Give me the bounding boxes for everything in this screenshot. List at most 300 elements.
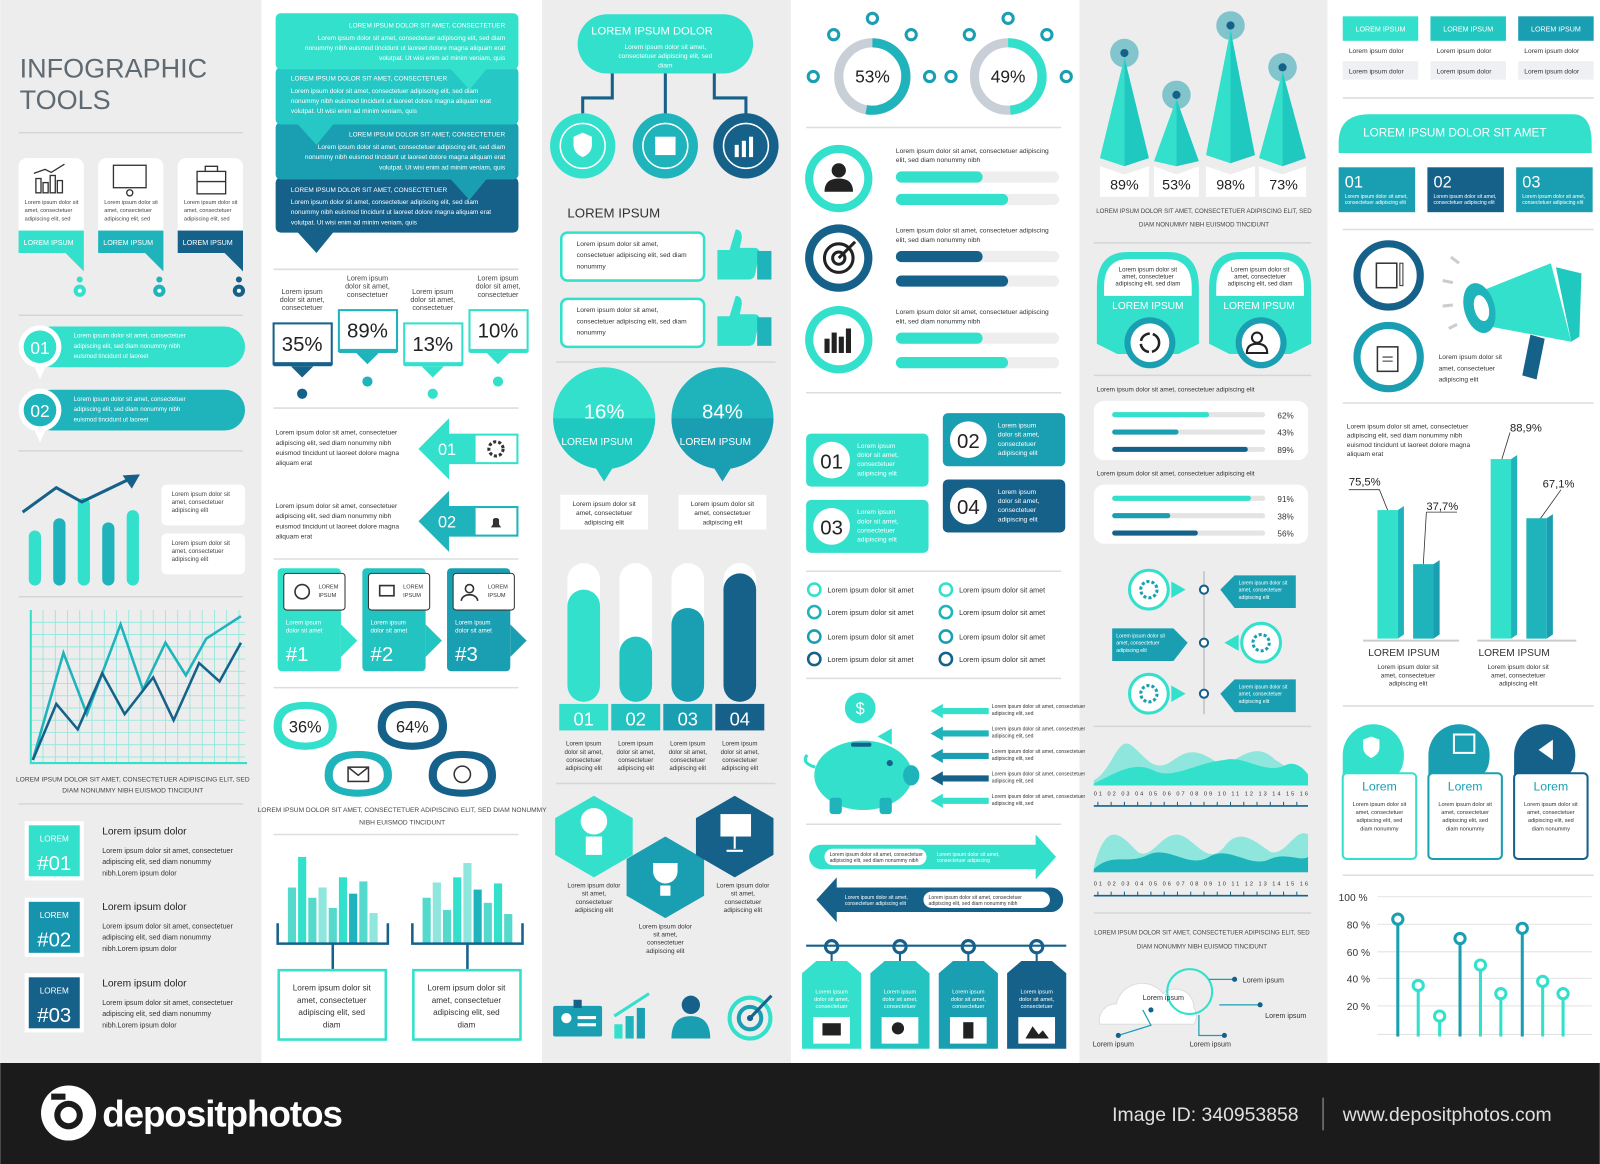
3D bar chart: 75,5% [1349, 477, 1381, 489]
capsule bar chart: adipiscing elit [669, 765, 706, 772]
mini bar chart left: adipiscing elit, sed [298, 1008, 366, 1017]
capsule bar chart: consectetuer [618, 757, 653, 764]
capsule bar chart: consectetuer [670, 757, 705, 764]
numbered boxes 01-04: dolor sit amet, [857, 518, 899, 525]
3D bar chart: 88,9% [1510, 423, 1542, 435]
caption [1094, 929, 1310, 951]
banner: Lorem ipsum dolor sit amet, [1434, 194, 1496, 200]
three icon cards: LOREM IPSUM [24, 239, 74, 247]
area chart 1: 01 02 03 04 05 06 07 08 09 10 11 12 13 14 15 16 [1094, 792, 1308, 798]
mini bar chart left: Lorem ipsum dolor sit [293, 984, 371, 993]
stacked speech boxes: LOREM IPSUM DOLOR SIT AMET, CONSECTETUER [349, 23, 506, 30]
capsule bar chart: Lorem ipsum [618, 741, 653, 748]
capsule bar chart: 03 [678, 708, 698, 729]
capsule bar chart [559, 563, 764, 772]
caption: NIBH EUISMOD TINCIDUNT [359, 819, 445, 826]
column 4 [802, 13, 1086, 1049]
hexagons: sit amet, [731, 891, 755, 898]
grid line chart [31, 610, 247, 763]
numbered boxes 01-04: Lorem ipsum [857, 509, 896, 516]
3D bar chart: euismod tincidunt ut laoreet dolore magna [1347, 442, 1470, 449]
icon: camera logo [41, 1085, 96, 1141]
circle 16%: 16% [584, 401, 625, 423]
two shield cards: Lorem ipsum dolor sit [1119, 266, 1177, 273]
capsule bar chart: dolor sit amet, [669, 749, 707, 756]
checklist: Lorem ipsum dolor sit amet [959, 609, 1045, 617]
checklist: Lorem ipsum dolor sit amet [828, 609, 913, 617]
cards #1 #2 #3 [278, 568, 527, 671]
stacked speech boxes: nonummy nibh euismod tincidunt ut laoreet dolore magna aliquam erat [291, 209, 491, 216]
numbered boxes 01-04: 04 [957, 497, 980, 519]
gear timeline: amet, consectetuer [1116, 641, 1160, 647]
banner 01: euismod tincidunt ut laoreet [74, 353, 149, 360]
cards #1 #2 #3: dolor sit amet [371, 627, 407, 634]
icon row: person [805, 145, 1059, 212]
area chart 2: 01 02 03 04 05 06 07 08 09 10 11 12 13 14 15 16 [1094, 881, 1308, 887]
list #02: adipiscing elit, sed diam nonummy [102, 934, 212, 942]
arrow 01: aliquam erat [276, 460, 312, 467]
bar chart with arrow: Lorem ipsum dolor sit [172, 540, 230, 547]
top tabs: Lorem ipsum dolor [1437, 68, 1492, 75]
list #01: Lorem ipsum dolor [102, 826, 187, 837]
3D bar chart: aliquam erat [1347, 451, 1383, 458]
title: INFOGRAPHIC [20, 54, 207, 84]
bubbles [274, 701, 496, 797]
three icon cards: adipiscing elit, sed [184, 216, 230, 222]
top tabs: LOREM IPSUM [1531, 26, 1581, 34]
list #02 [25, 898, 234, 957]
list #03: Lorem ipsum dolor [102, 978, 187, 989]
arrow list: adipiscing elit, sed [992, 711, 1034, 717]
three icon cards: adipiscing elit, sed [104, 216, 150, 222]
numbered boxes 01-04: dolor sit amet, [857, 452, 899, 459]
percentage tags: dolor sit amet, [476, 283, 520, 291]
two shield cards: LOREM IPSUM [1112, 301, 1183, 312]
stacked speech boxes: volutpat. Ut wisi enim ad minim veniam, quis [291, 219, 417, 226]
capsule bar chart: dolor sit amet, [617, 749, 655, 756]
gear timeline: amet, consectetuer [1239, 692, 1282, 698]
gear timeline: adipiscing elit [1239, 699, 1270, 705]
numbered boxes 01-04: consectetuer [857, 461, 896, 468]
icon row: person: elit, sed diam nonummy nibh [896, 157, 981, 164]
top pill with connectors [550, 14, 779, 179]
circle 84%: adipiscing elit [703, 519, 743, 526]
donut 53%: 53% [855, 67, 890, 87]
list #01: adipiscing elit, sed diam nonummy [102, 858, 212, 866]
cone chart: 73% [1269, 178, 1298, 194]
list #03 [25, 973, 234, 1032]
lollipop chart: 60 % [1347, 948, 1370, 959]
top pill with connectors: Lorem ipsum dolor sit amet, [624, 44, 706, 51]
double arrows: adipiscing elit, sed diam nonummy nibh [929, 901, 1018, 907]
cards #1 #2 #3: IPSUM [403, 593, 421, 599]
progress panel 2: 38% [1277, 512, 1294, 521]
speech cards [1343, 724, 1588, 859]
capsule bar chart: dolor sit amet, [565, 749, 603, 756]
list #03: LOREM [40, 987, 69, 996]
arrow list: adipiscing elit, sed [992, 801, 1034, 807]
percentage tags [274, 275, 528, 399]
caption: LOREM IPSUM DOLOR SIT AMET, CONSECTETUER ADIPISCING ELIT, SED [16, 776, 250, 783]
mini bar chart left: amet, consectetuer [297, 996, 367, 1005]
stacked speech boxes: nonummy nibh euismod tincidunt ut laoreet dolore magna aliquam erat [305, 154, 505, 161]
cards #1 #2 #3: LOREM [318, 585, 339, 591]
arrow 02: euismod tincidunt ut laoreet dolore magna [276, 523, 399, 530]
percentage tags: Lorem ipsum [282, 288, 323, 296]
double arrows: Lorem ipsum dolor sit amet, [937, 852, 1000, 858]
hexagons: Lorem ipsum dolor [716, 883, 770, 890]
progress panel 2 [1094, 470, 1308, 544]
footer bar: depositphotos [102, 1093, 342, 1134]
column 3 [550, 14, 779, 1039]
percentage tags: 10% [478, 321, 518, 343]
donut 49%: 49% [991, 67, 1025, 87]
stacked speech boxes: Lorem ipsum dolor sit amet, consectetuer adipiscing elit, sed diam [291, 88, 478, 95]
box with thumb 1 [561, 230, 771, 281]
three icon cards: Lorem ipsum dolor sit [184, 200, 238, 206]
speech cards: Lorem [1533, 780, 1568, 794]
double arrows: Lorem ipsum dolor sit amet, consectetuer [830, 852, 923, 858]
icon row: target: elit, sed diam nonummy nibh [896, 237, 981, 244]
caption: DIAM NONUMMY NIBH EUISMOD TINCIDUNT [1137, 944, 1267, 951]
capsule bar chart: Lorem ipsum [670, 741, 705, 748]
stacked speech boxes: Lorem ipsum dolor sit amet, consectetuer adipiscing elit, sed diam [318, 144, 505, 151]
circle 84% [671, 367, 773, 529]
bar chart with arrow: amet, consectetuer [172, 548, 224, 555]
area chart 1 [1094, 743, 1308, 806]
stacked speech boxes [276, 13, 518, 253]
speech cards: Lorem [1448, 780, 1482, 794]
lollipop chart: 100 % [1339, 893, 1368, 904]
list #03: Lorem ipsum dolor sit amet, consectetuer [102, 999, 234, 1007]
circle 16%: Lorem ipsum dolor sit [572, 501, 636, 508]
capsule bar chart: consectetuer [722, 757, 757, 764]
caption [16, 776, 250, 795]
bar chart with arrow [23, 474, 245, 586]
list #02: LOREM [40, 911, 69, 920]
hexagons: adipiscing elit [724, 907, 762, 914]
banner: LOREM IPSUM DOLOR SIT AMET [1363, 127, 1547, 140]
cloud network: Lorem ipsum [1093, 1041, 1134, 1049]
progress panel 1 [1094, 387, 1308, 460]
3D bar chart: 67,1% [1543, 479, 1575, 491]
capsule bar chart: consectetuer [566, 757, 601, 764]
checklist [808, 584, 1045, 665]
arrow 01 [276, 418, 518, 479]
hexagons: adipiscing elit [646, 948, 685, 955]
three icon cards: amet, consectetuer [104, 208, 152, 214]
progress panel 2: 91% [1277, 495, 1294, 504]
list #03: adipiscing elit, sed diam nonummy [102, 1010, 212, 1018]
cards #1 #2 #3: #3 [455, 644, 478, 666]
two shield cards: adipiscing elit, sed diam [1115, 281, 1180, 288]
hexagons: consectetuer [576, 899, 613, 906]
gear timeline: adipiscing elit [1239, 595, 1270, 601]
speech cards: Lorem ipsum dolor sit [1524, 802, 1578, 808]
stacked speech boxes: LOREM IPSUM DOLOR SIT AMET, CONSECTETUER [291, 187, 447, 194]
banner: 03 [1522, 174, 1540, 192]
arrow 01: adipiscing elit, sed diam nonummy nibh [276, 440, 392, 447]
bar chart with arrow: Lorem ipsum dolor sit [172, 491, 230, 498]
stacked speech boxes: LOREM IPSUM DOLOR SIT AMET, CONSECTETUER [349, 132, 506, 139]
list #01: LOREM [40, 835, 69, 844]
arrow 02 [276, 491, 518, 552]
3D bar chart: LOREM IPSUM [1478, 648, 1550, 659]
list #02: Lorem ipsum dolor sit amet, consectetuer [102, 922, 234, 930]
top tabs: Lorem ipsum dolor [1349, 68, 1405, 75]
percentage tags: consectetuer [478, 291, 519, 299]
hanging tags: Lorem ipsum [815, 990, 848, 996]
arrow list: Lorem ipsum dolor sit amet, consectetuer [992, 771, 1086, 777]
area chart 2 [1094, 833, 1308, 896]
mini bar chart right: diam [458, 1020, 475, 1029]
bar chart with arrow: adipiscing elit [172, 556, 209, 563]
capsule bar chart: Lorem ipsum [566, 741, 601, 748]
gear timeline: amet, consectetuer [1239, 588, 1282, 594]
stacked speech boxes: Lorem ipsum dolor sit amet, consectetuer adipiscing elit, sed diam [291, 199, 478, 206]
list #02: Lorem ipsum dolor [102, 902, 187, 913]
hanging tags [802, 941, 1066, 1049]
numbered boxes 01-04 [806, 413, 1065, 553]
banner 02: adipiscing elit, sed diam nonummy nibh [74, 406, 180, 413]
banner: consectetuer adipiscing elit [1522, 200, 1584, 206]
list #01 [25, 821, 234, 880]
numbered boxes 01-04: 03 [820, 518, 843, 540]
progress panel 1: 89% [1277, 446, 1294, 455]
hexagons: Lorem ipsum dolor [567, 883, 621, 890]
arrow list: adipiscing elit, sed [992, 778, 1034, 784]
donut 49% [946, 13, 1071, 110]
icon row: chart [805, 306, 1059, 373]
cards #1 #2 #3: IPSUM [318, 593, 337, 599]
banner 02: 02 [30, 401, 50, 421]
speech cards: adipiscing elit, sed [1528, 818, 1574, 824]
box with thumb 1: Lorem ipsum dolor sit amet, [577, 241, 658, 248]
stacked speech boxes: nonummy nibh euismod tincidunt ut laoreet dolore magna aliquam erat [305, 45, 505, 52]
percentage tags: Lorem ipsum [477, 275, 519, 283]
speech cards: Lorem ipsum dolor sit [1438, 802, 1492, 808]
3D bar chart: Lorem ipsum dolor sit amet, consectetuer [1347, 423, 1469, 430]
hexagons [555, 796, 773, 955]
stacked speech boxes: volutpat. Ut wisi enim ad minim veniam, quis [291, 108, 417, 115]
checklist: Lorem ipsum dolor sit amet [828, 656, 913, 664]
capsule bar chart: Lorem ipsum [722, 741, 757, 748]
progress panel 1: Lorem ipsum dolor sit amet, consectetuer adipiscing elit [1097, 387, 1255, 394]
icon circles and megaphone: amet, consectetuer [1439, 365, 1496, 372]
donut 53% [808, 13, 935, 110]
cloud network: Lorem ipsum [1190, 1041, 1231, 1049]
arrow 01: Lorem ipsum dolor sit amet, consectetuer [276, 430, 398, 437]
lollipop chart: 40 % [1347, 974, 1370, 985]
3D bar chart: Lorem ipsum dolor sit [1377, 664, 1439, 671]
double arrows: consectetuer adipiscing elit [845, 901, 907, 907]
capsule bar chart: 02 [626, 708, 646, 729]
arrow 02: aliquam erat [276, 534, 312, 541]
hanging tags: Lorem ipsum [952, 990, 985, 996]
stacked speech boxes: volutpat. Ut wisi enim ad minim veniam, quis [379, 55, 505, 62]
hanging tags: consectetuer [1021, 1004, 1053, 1010]
cards #1 #2 #3: Lorem ipsum [286, 619, 321, 626]
top pill with connectors: consectetuer adipiscing elit, sed [618, 53, 713, 60]
capsule bar chart: 01 [574, 708, 594, 729]
hanging tags: consectetuer [816, 1004, 848, 1010]
arrow 01: 01 [438, 441, 456, 459]
progress panel 2: 56% [1277, 530, 1294, 539]
checklist: Lorem ipsum dolor sit amet [828, 587, 913, 595]
footer bar: Image ID: 340953858 [1112, 1104, 1299, 1126]
three icon cards: amet, consectetuer [25, 208, 73, 214]
capsule bar chart: adipiscing elit [721, 765, 758, 772]
numbered boxes 01-04: adipiscing elit [998, 516, 1038, 523]
top tabs: Lorem ipsum dolor [1524, 68, 1580, 75]
piggy bank: $ [856, 700, 865, 718]
arrow 02: 02 [438, 513, 456, 531]
hexagons: sit amet, [653, 932, 678, 939]
speech cards: amet, consectetuer [1527, 810, 1575, 816]
banner 02: euismod tincidunt ut laoreet [74, 416, 149, 423]
numbered boxes 01-04: adipiscing elit [998, 450, 1038, 457]
percentage tags: Lorem ipsum [347, 275, 388, 283]
banner: Lorem ipsum dolor sit amet, [1345, 194, 1408, 200]
mini bar chart right: Lorem ipsum dolor sit [427, 984, 506, 993]
circle 16% [553, 367, 655, 529]
banner 01: 01 [30, 338, 50, 358]
arrow 02: adipiscing elit, sed diam nonummy nibh [276, 513, 392, 520]
list #01: Lorem ipsum dolor sit amet, consectetuer [102, 847, 234, 855]
two shield cards: amet, consectetuer [1234, 274, 1286, 281]
arrow list: Lorem ipsum dolor sit amet, consectetuer [992, 794, 1086, 800]
list #02: #02 [37, 930, 71, 952]
hexagons: consectetuer [725, 899, 762, 906]
hexagons: consectetuer [647, 940, 685, 947]
heading lorem ipsum: LOREM IPSUM [567, 205, 660, 220]
mini bar chart right [412, 863, 523, 1040]
cloud network: Lorem ipsum [1143, 994, 1184, 1002]
capsule bar chart: 04 [730, 708, 750, 729]
hanging tags: Lorem ipsum [884, 990, 917, 996]
circle 84%: amet, consectetuer [694, 510, 751, 517]
banner: Lorem ipsum dolor sit amet, [1522, 194, 1585, 200]
3D bar chart: adipiscing elit [1389, 681, 1427, 688]
list #03: #03 [37, 1005, 71, 1027]
three icon cards: amet, consectetuer [184, 208, 232, 214]
hanging tags: dolor sit amet, [882, 997, 918, 1003]
3D bar chart: adipiscing elit, sed diam nonummy nibh [1347, 433, 1463, 440]
speech cards: amet, consectetuer [1356, 810, 1403, 816]
numbered boxes 01-04: 02 [957, 431, 980, 453]
speech cards: adipiscing elit, sed [1357, 818, 1402, 824]
icon circles and megaphone: adipiscing elit [1439, 377, 1479, 384]
bar chart with arrow: adipiscing elit [172, 507, 209, 514]
caption: LOREM IPSUM DOLOR SIT AMET, CONSECTETUER ADIPISCING ELIT, SED [1094, 929, 1310, 936]
circle 16%: LOREM IPSUM [561, 437, 633, 448]
numbered boxes 01-04: consectetuer [998, 507, 1037, 514]
list #03: nibh.Lorem ipsum dolor [102, 1021, 177, 1029]
speech cards: Lorem [1362, 780, 1397, 794]
mini bar chart right: adipiscing elit, sed [433, 1008, 500, 1017]
numbered boxes 01-04: Lorem ipsum [857, 443, 896, 450]
banner: consectetuer adipiscing elit [1345, 200, 1407, 206]
two shield cards [1097, 252, 1311, 368]
banner 02: Lorem ipsum dolor sit amet, consectetuer [74, 396, 186, 403]
top tabs: Lorem ipsum dolor [1437, 48, 1492, 55]
cards #1 #2 #3: IPSUM [488, 593, 506, 599]
cards #1 #2 #3: #1 [286, 644, 309, 666]
numbered boxes 01-04: consectetuer [857, 528, 896, 535]
percentage tags: 13% [412, 334, 453, 356]
three icon cards: LOREM IPSUM [103, 239, 153, 247]
top tabs: Lorem ipsum dolor [1349, 48, 1405, 55]
three icon cards: adipiscing elit, sed [25, 216, 71, 222]
arrow 01: euismod tincidunt ut laoreet dolore magna [276, 450, 399, 457]
box with thumb 2: Lorem ipsum dolor sit amet, [577, 307, 658, 314]
mini bar chart left: diam [323, 1020, 341, 1029]
stacked speech boxes: nonummy nibh euismod tincidunt ut laoreet dolore magna aliquam erat [291, 98, 491, 105]
list #01: nibh.Lorem ipsum dolor [102, 869, 177, 877]
column 2 [258, 13, 547, 1040]
icon row: chart: Lorem ipsum dolor sit amet, consectetuer adipiscing [896, 309, 1049, 316]
double arrows: consectetuer adipiscing [937, 858, 990, 864]
banner: 02 [1434, 174, 1452, 192]
caption: LOREM IPSUM DOLOR SIT AMET, CONSECTETUER ADIPISCING ELIT, SED DIAM NONUMMY [258, 807, 547, 814]
cards #1 #2 #3: dolor sit amet [286, 627, 323, 634]
hanging tags: dolor sit amet, [814, 997, 850, 1003]
column 1 [16, 54, 250, 1032]
cards #1 #2 #3: #2 [371, 644, 393, 666]
3D bar chart: adipiscing elit [1499, 681, 1538, 688]
icon row: target [805, 224, 1059, 292]
banner: 01 [1345, 174, 1363, 192]
mini bar chart right: amet, consectetuer [432, 996, 501, 1005]
list #02: nibh.Lorem ipsum dolor [102, 945, 177, 953]
hanging tags: consectetuer [884, 1004, 916, 1010]
stacked speech boxes: volutpat. Ut wisi enim ad minim veniam, quis [379, 164, 505, 171]
banner [1339, 114, 1593, 212]
speech cards: diam nonummy [1446, 826, 1485, 832]
3D bar chart [1347, 423, 1576, 688]
circle 84%: 84% [702, 401, 743, 423]
cards #1 #2 #3: LOREM [488, 585, 508, 591]
list #01: #01 [37, 853, 71, 875]
numbered boxes 01-04: consectetuer [998, 441, 1037, 448]
box with thumb 2 [561, 296, 771, 347]
checklist: Lorem ipsum dolor sit amet [828, 634, 913, 642]
box with thumb 2: nonummy [577, 330, 606, 337]
speech cards: adipiscing elit, sed [1442, 818, 1488, 824]
hanging tags: Lorem ipsum [1020, 990, 1053, 996]
cloud network: Lorem ipsum [1265, 1012, 1306, 1020]
bottom icons row [553, 994, 771, 1039]
column 1: TOOLS [20, 85, 111, 115]
top tabs: Lorem ipsum dolor [1524, 48, 1580, 55]
arrow list: adipiscing elit, sed [992, 756, 1034, 762]
progress panel 1: 62% [1277, 411, 1294, 420]
checklist: Lorem ipsum dolor sit amet [959, 656, 1045, 664]
box with thumb 2: consectetuer adipiscing elit, sed diam [577, 318, 687, 325]
top tabs [1343, 16, 1594, 80]
bubbles: 64% [396, 718, 429, 736]
bubbles: 36% [289, 718, 322, 736]
gear timeline: adipiscing elit [1116, 648, 1147, 654]
banner: consectetuer adipiscing elit [1434, 200, 1495, 206]
progress panel 2: Lorem ipsum dolor sit amet, consectetuer adipiscing elit [1097, 470, 1255, 477]
top tabs: LOREM IPSUM [1443, 26, 1493, 34]
piggy bank [805, 693, 919, 814]
arrow list [931, 704, 1086, 808]
footer bar [0, 1063, 1600, 1164]
3D bar chart: 37,7% [1426, 501, 1458, 513]
circle 84%: Lorem ipsum dolor sit [691, 501, 754, 508]
